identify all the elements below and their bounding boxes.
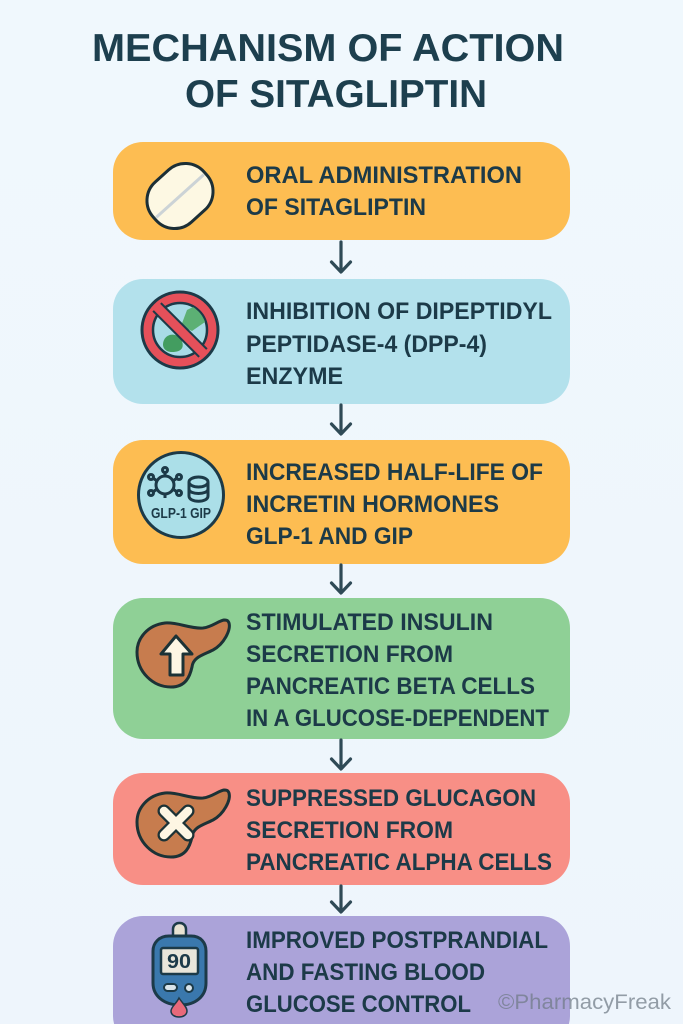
step text: [246, 785, 552, 876]
step text: SECRETION FROM: [246, 641, 453, 668]
step text: OF SITAGLIPTIN: [246, 194, 426, 221]
step text: SUPPRESSED GLUCAGON: [246, 785, 536, 812]
panel: glucagon suppression: [113, 773, 570, 885]
step text: [246, 927, 548, 1018]
step text: [246, 162, 522, 221]
step text: PANCREATIC BETA CELLS: [246, 673, 535, 700]
arrow: [332, 405, 350, 434]
panel: DPP-4 inhibition: [113, 279, 570, 404]
step text: [246, 298, 552, 390]
step text: [246, 609, 549, 732]
step text: GLUCOSE CONTROL: [246, 991, 471, 1018]
icon: prohibited enzyme: [142, 292, 218, 368]
step text: ENZYME: [246, 363, 343, 390]
icon: pancreas with up arrow: [137, 620, 229, 687]
title: MECHANISM OF ACTION: [92, 27, 564, 70]
step text: [246, 459, 543, 550]
step text: INHIBITION OF DIPEPTIDYL: [246, 298, 552, 325]
icon: pancreas with cross: [137, 790, 229, 857]
arrow: [332, 565, 350, 593]
step text: GLP-1 AND GIP: [246, 523, 413, 550]
icon: glucose meter: [153, 923, 206, 1017]
step text: ORAL ADMINISTRATION: [246, 162, 522, 189]
title: [92, 27, 564, 116]
step text: PANCREATIC ALPHA CELLS: [246, 849, 552, 876]
icon: tablet: [137, 153, 223, 239]
step text: IMPROVED POSTPRANDIAL: [246, 927, 548, 954]
step text: INCRETIN HORMONES: [246, 491, 499, 518]
step text: INCREASED HALF-LIFE OF: [246, 459, 543, 486]
watermark: ©PharmacyFreak: [498, 991, 672, 1014]
step text: STIMULATED INSULIN: [246, 609, 493, 636]
panel: improved glucose control: [113, 916, 570, 1024]
panel: insulin secretion: [113, 598, 570, 739]
panel: oral administration: [113, 142, 570, 240]
step text: AND FASTING BLOOD: [246, 959, 485, 986]
arrow: [332, 740, 350, 769]
arrow: [332, 886, 350, 912]
icon: GLP-1 and GIP hormones: GLP-1 GIP: [151, 505, 211, 522]
panel: incretin half-life: [113, 440, 570, 564]
title: OF SITAGLIPTIN: [185, 73, 487, 116]
step text: IN A GLUCOSE-DEPENDENT: [246, 705, 549, 732]
icon: GLP-1 and GIP hormones: [138, 452, 224, 538]
step text: SECRETION FROM: [246, 817, 453, 844]
icon: glucose meter: 90: [167, 951, 191, 973]
arrow: [332, 242, 350, 272]
step text: PEPTIDASE-4 (DPP-4): [246, 331, 487, 358]
